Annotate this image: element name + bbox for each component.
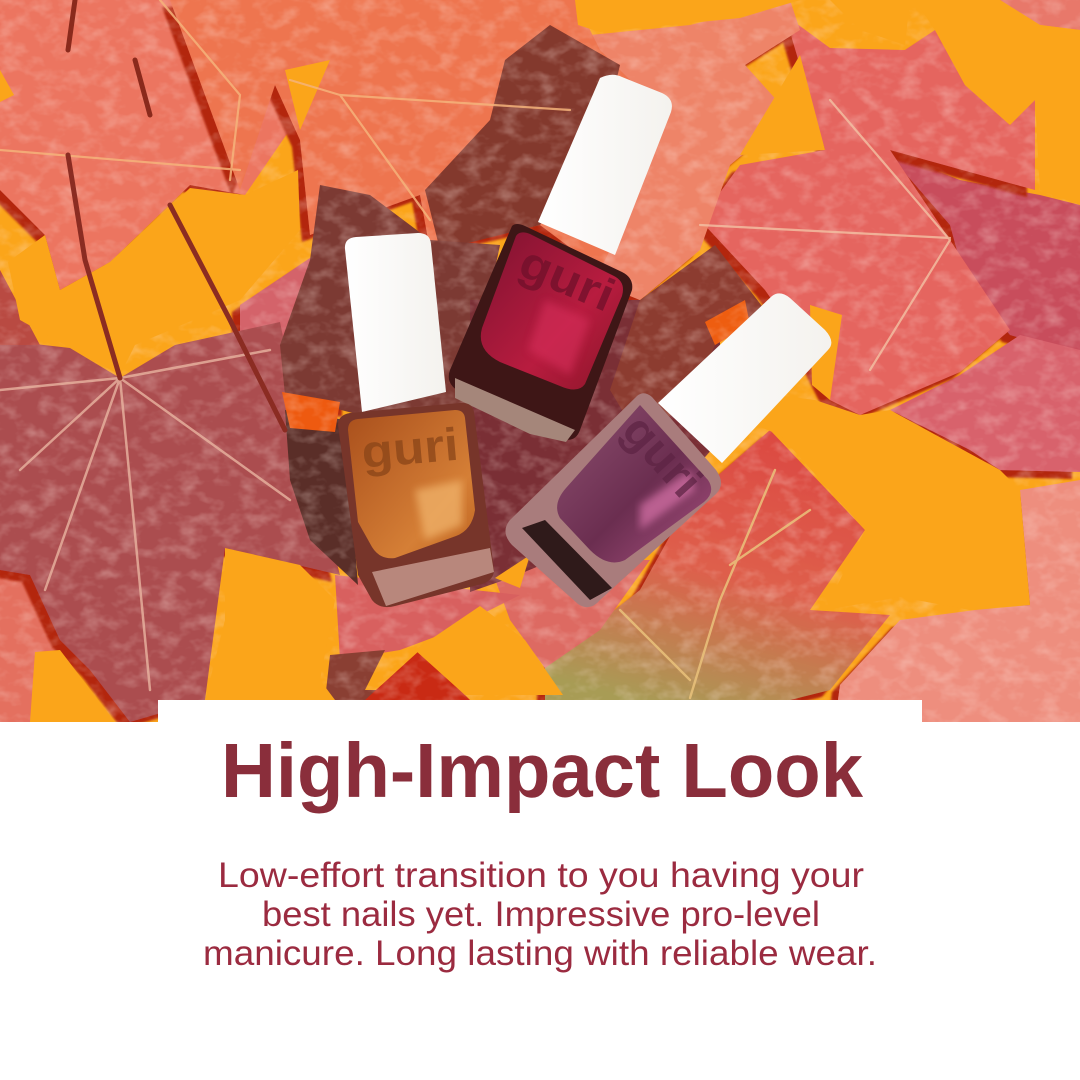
orange paper patches on top of texture (0, 0, 1080, 722)
bottle body: red polish (449, 224, 632, 440)
leaf: top centre orange-red (170, 0, 660, 270)
bottle: purple polish (505, 293, 831, 607)
bottle: red polish (449, 75, 672, 442)
polish fill: purple (557, 405, 711, 562)
body text: best nails yet. Impressive pro-level (262, 895, 820, 934)
leaf: left edge small (0, 270, 40, 345)
bottle body: purple polish (505, 393, 721, 607)
bottle cap: copper polish (345, 233, 446, 412)
leaf: lower scrap (326, 650, 385, 700)
leaf: far right crimson upper (896, 160, 1080, 350)
logo: purple bottle: guri (613, 404, 713, 507)
white text panel (0, 700, 1080, 1080)
polish fill: red (481, 232, 623, 390)
leaf: far right rose lower (890, 335, 1080, 472)
body text (203, 856, 877, 973)
leaf veins (0, 0, 950, 698)
leaf: upper centre salmon (592, 2, 800, 300)
leaf: bottom left corner (0, 575, 60, 722)
leaf: large right salmon (700, 15, 1035, 415)
leaf: centre bottom (335, 575, 520, 660)
body text: Low-effort transition to you having your (218, 856, 864, 895)
body text: manicure. Long lasting with reliable wear. (203, 934, 877, 973)
bottle cap: red polish (538, 75, 672, 255)
highlight: copper (415, 480, 462, 540)
leaf: bottom right pink (835, 480, 1080, 722)
leaf: big left mottled (0, 322, 340, 722)
leaf: top left (0, 0, 287, 290)
title: High-Impact Look (221, 728, 863, 814)
leaf: pink behind bottles lower centre (488, 560, 650, 668)
mottled texture overlay (0, 0, 1080, 722)
photo background: autumn leaves on orange paper (0, 0, 1080, 722)
logo: copper bottle: guri (359, 418, 461, 478)
polish fill: copper (348, 410, 475, 558)
leaf: rose behind copper cap (240, 240, 350, 410)
bottle cap: purple polish (658, 293, 831, 463)
highlight: red (528, 300, 590, 375)
bottle: copper polish (338, 233, 494, 607)
bottle body: copper polish (338, 403, 494, 607)
leaf: dark shadow leaves at centre (280, 25, 765, 592)
dark base band: purple (522, 520, 612, 600)
highlight: purple (640, 470, 695, 530)
leaf: top right corner (1000, 0, 1080, 30)
leaf: bottom centre red to green (545, 430, 890, 700)
logo: red bottle: guri (512, 235, 623, 321)
base glass: red (455, 378, 575, 442)
base glass: copper (372, 548, 494, 606)
